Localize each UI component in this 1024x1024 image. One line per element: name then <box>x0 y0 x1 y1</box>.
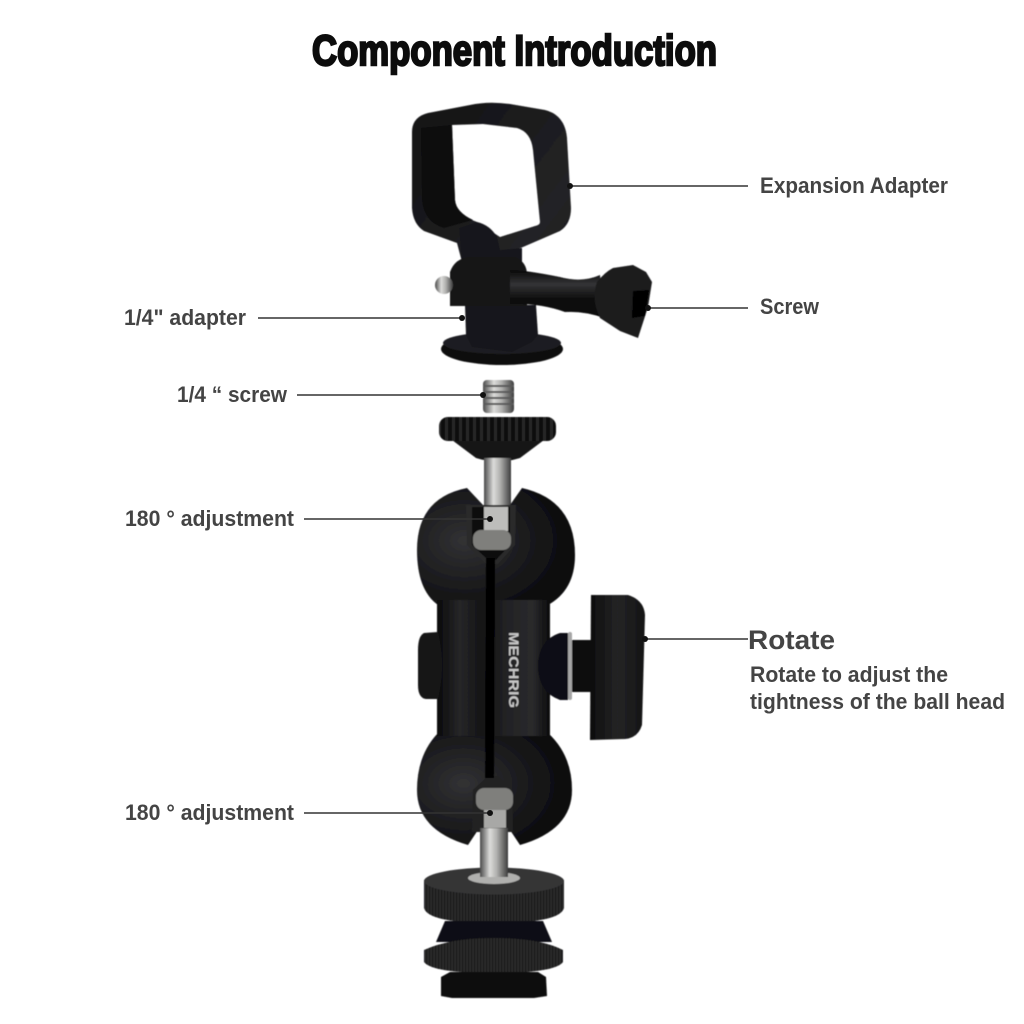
title: Component Introduction <box>312 27 717 75</box>
callout: 1/4" adapter: 1/4" adapter <box>124 305 246 330</box>
shoe foot <box>441 972 547 998</box>
callout: Rotate: tightness of the ball head <box>750 689 1005 714</box>
lower knurled ring <box>424 938 563 973</box>
swivel joint <box>450 257 527 306</box>
callout: Rotate <box>642 625 1005 714</box>
callout: Rotate: Rotate <box>748 625 835 655</box>
upper socket and knurl <box>466 505 516 564</box>
callout: 1/4 screw <box>177 382 486 407</box>
lower socket and knurl <box>472 776 513 832</box>
steel post <box>484 458 511 508</box>
threaded screw <box>483 380 514 413</box>
callout: Screw <box>645 294 820 319</box>
upper ball <box>417 488 575 605</box>
arm screw shaft <box>510 270 604 318</box>
centre slit <box>485 558 495 778</box>
mount block <box>465 305 538 352</box>
screw knob <box>595 265 652 338</box>
callout: Expansion Adapter <box>567 173 948 198</box>
frame neck <box>459 222 522 262</box>
arm body <box>437 600 550 736</box>
callout: 1/4" adapter <box>124 305 465 330</box>
product: ball head arm <box>417 380 645 845</box>
lower ball <box>417 733 572 845</box>
callout: Rotate: Rotate to adjust the <box>750 662 948 687</box>
silver ball <box>435 276 453 294</box>
product: expansion adapter assembly <box>412 103 652 365</box>
rotate knob <box>590 595 645 740</box>
product: hot shoe mount <box>424 828 564 998</box>
left button <box>418 632 442 699</box>
callout: 1/4 screw: 1/4 “ screw <box>177 382 288 407</box>
hex socket <box>632 290 649 318</box>
callout: lower 180 adjustment <box>125 800 493 825</box>
brand text: MECHRIG <box>506 632 522 708</box>
base plate <box>441 332 563 365</box>
adapter frame <box>412 103 571 312</box>
lower steel post <box>480 828 508 876</box>
frame inner wall <box>421 125 473 228</box>
top knurled ring <box>424 860 564 923</box>
callout: Screw: Screw <box>760 294 820 319</box>
callout: Expansion Adapter: Expansion Adapter <box>760 173 948 198</box>
callout: lower 180 adjustment: 180 ° adjustment <box>125 800 295 825</box>
callout: upper 180 adjustment <box>125 506 493 531</box>
callout: upper 180 adjustment: 180 ° adjustment <box>125 506 295 531</box>
right stud <box>538 632 592 700</box>
neck <box>436 921 552 942</box>
knurled knob <box>439 417 556 462</box>
